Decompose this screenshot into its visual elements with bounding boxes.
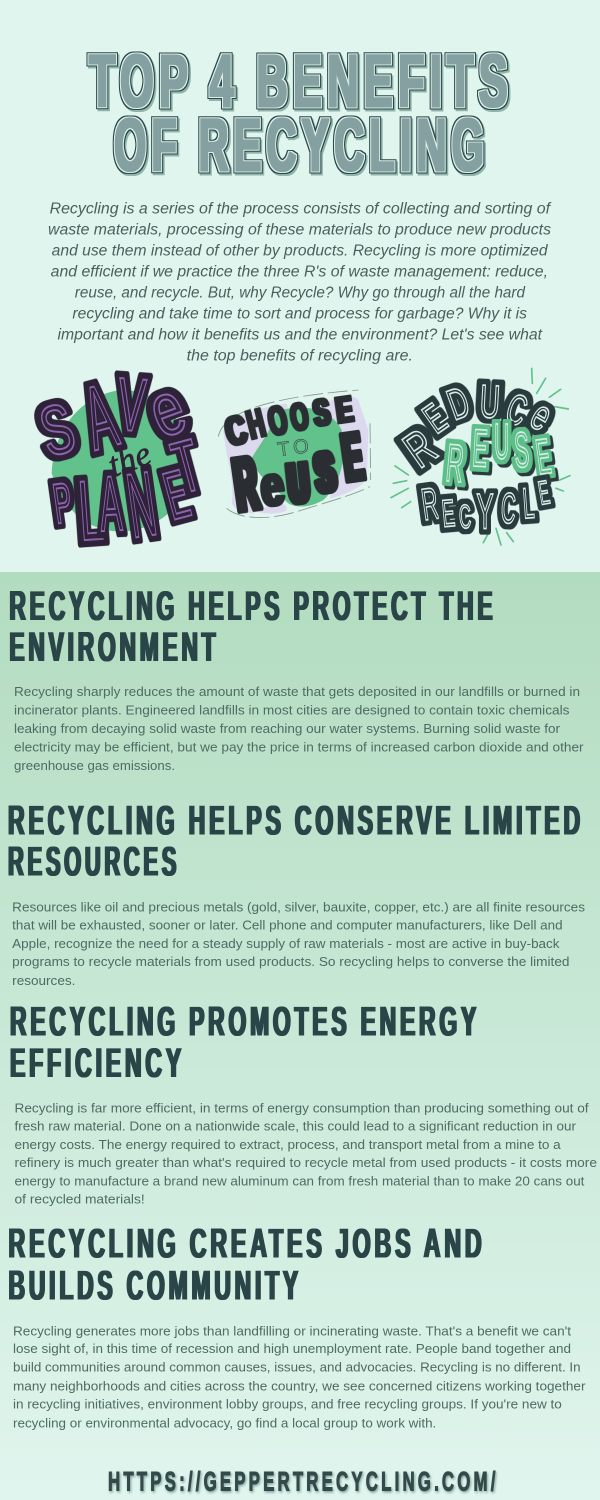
- lettering: recycle: Y: [476, 485, 494, 540]
- heading: [10, 998, 480, 1086]
- lettering: reduce: R: [391, 415, 450, 483]
- lettering: reduce: C: [500, 384, 533, 436]
- lettering: reuse: E: [473, 416, 493, 485]
- heading: [8, 1220, 485, 1308]
- body text: lose sight of, in this time of recession and high unemployment rate. People band together and: [13, 1341, 571, 1356]
- lettering: reduce: e: [523, 390, 561, 440]
- green globe: [52, 390, 190, 532]
- lettering: recycle: R: [418, 478, 442, 530]
- lettering: save: e: [138, 365, 196, 455]
- lettering: save: V: [115, 361, 149, 447]
- body text: resources.: [12, 973, 75, 988]
- body text: Resources like oil and precious metals (gold, silver, bauxite, copper, etc.) are all finite resources: [12, 899, 585, 914]
- lettering: reuse: S: [514, 421, 534, 485]
- title: [89, 40, 513, 186]
- lettering: planet: T: [164, 423, 209, 509]
- lettering: reduce: U: [477, 372, 503, 432]
- body text: energy to manufacture a brand new aluminum can from fresh material than to make 20 cans out: [14, 1174, 585, 1189]
- body text: electricity may be efficient, but we pay the price in terms of increased carbon dioxide and other: [14, 740, 584, 754]
- green rays: [391, 368, 570, 545]
- heading: EFFICIENCY: [10, 1039, 185, 1086]
- body text: many neighborhoods and cities across the country, we see concerned citizens working together: [13, 1378, 586, 1393]
- body text: that will be exhausted, sooner or later. Cell phone and computer manufacturers, like Dell and: [12, 917, 563, 932]
- sticker: save the planet: [29, 356, 212, 564]
- lettering: reuse: S: [513, 423, 530, 479]
- lettering: planet: [47, 418, 212, 564]
- intro paragraph: waste materials, processing of these materials to produce new products: [48, 221, 551, 238]
- lettering: choose: [221, 389, 355, 455]
- lettering: planet: E: [156, 455, 197, 535]
- body text: refinery is much greater than what's required to recycle metal from used products - it costs more: [14, 1155, 597, 1170]
- body text: energy costs. The energy required to extract, process, and transport metal from a mine to a: [14, 1137, 561, 1152]
- heading: [8, 796, 584, 884]
- lettering: reuse: U: [493, 411, 510, 474]
- body text: Recycling is far more efficient, in terms of energy consumption than producing something out of: [14, 1100, 589, 1115]
- lettering: reuse: E: [533, 429, 554, 486]
- lettering: recycle: [417, 470, 554, 543]
- lettering: reuse: E: [534, 428, 558, 492]
- body text: build communities around common causes, issues, and advocacies. Recycling is no different. In: [13, 1360, 581, 1375]
- lettering: recycle: C: [458, 497, 472, 536]
- lettering: save: A: [74, 365, 126, 469]
- body text: greenhouse gas emissions.: [14, 758, 175, 773]
- panel: recycling promotes energy efficiency: [10, 998, 597, 1207]
- lettering: recycle: E: [535, 473, 552, 512]
- body text: recycling or environmental advocacy, go find a local group to work with.: [13, 1415, 436, 1430]
- heading: RESOURCES: [8, 837, 180, 884]
- lettering: reuse: S: [512, 418, 532, 483]
- lettering: recycle: E: [439, 488, 458, 539]
- lettering: reuse: R: [444, 433, 466, 494]
- body text: Recycling sharply reduces the amount of waste that gets deposited in our landfills or burned in: [14, 684, 580, 699]
- intro paragraph: the top benefits of recycling are.: [187, 347, 413, 364]
- intro paragraph: and efficient if we practice the three R's of waste management: reduce,: [51, 263, 548, 280]
- intro paragraph: Recycling is a series of the process consists of collecting and sorting of: [50, 200, 552, 217]
- lettering: recycle: Y: [475, 479, 495, 543]
- lettering: recycle: L: [521, 479, 536, 529]
- lettering: reduce: D: [441, 377, 476, 430]
- body text: Recycling generates more jobs than landfilling or incinerating waste. That's a benefit we can't: [13, 1323, 571, 1338]
- body text: [13, 1323, 586, 1430]
- intro paragraph: reuse, and recycle. But, why Recycle? Why go through all the hard: [75, 284, 526, 301]
- lettering: save: [29, 356, 200, 477]
- lettering: reuse: R: [442, 429, 468, 497]
- lettering: planet: A: [97, 460, 124, 548]
- lettering: choose: E: [334, 389, 355, 431]
- lettering: reuse: E: [531, 426, 556, 490]
- intro paragraph: and use them instead of other by products. Recycling is more optimized: [52, 242, 549, 259]
- lettering: planet: L: [72, 456, 109, 564]
- lettering: reduce: E: [412, 391, 459, 446]
- lettering: choose: C: [221, 407, 251, 455]
- lettering: planet: A: [95, 455, 127, 554]
- intro paragraph: [48, 200, 552, 364]
- sticker: reduce reuse recycle: [391, 368, 570, 545]
- panel: recycling helps protect the environment: [9, 582, 584, 773]
- heading: BUILDS COMMUNITY: [8, 1261, 302, 1308]
- heading: ENVIRONMENT: [9, 623, 219, 670]
- lettering: recycle: R: [417, 474, 443, 534]
- body text: [12, 899, 585, 988]
- lettering: planet: T: [161, 418, 212, 514]
- panel: recycling creates jobs and builds community: [8, 1220, 586, 1430]
- lettering: recycle: C: [500, 484, 517, 534]
- body text: Apple, recognize the need for a steady supply of raw materials - most are active in buy-back: [12, 936, 560, 951]
- green blob: [252, 408, 343, 507]
- lettering: choose: H: [243, 401, 269, 448]
- lettering: recycle: C: [457, 493, 473, 539]
- lettering: reduce: U: [478, 376, 501, 429]
- lettering: reuse: U: [285, 453, 311, 516]
- lettering: to: TO: [276, 435, 314, 461]
- lettering: reuse: S: [311, 441, 339, 505]
- body text: in recycling initiatives, environment lobby groups, and free recycling groups. If you're new to: [13, 1397, 562, 1412]
- body text: [14, 684, 584, 773]
- lettering: choose: O: [264, 396, 291, 444]
- lettering: reuse: R: [229, 442, 263, 528]
- lettering: recycle: E: [534, 470, 554, 516]
- lettering: planet: N: [119, 447, 164, 563]
- lettering: reuse: U: [496, 414, 513, 477]
- lettering: reduce: e: [519, 386, 564, 445]
- lettering: recycle: L: [519, 476, 537, 532]
- lettering: reduce: E: [415, 395, 456, 443]
- sticker: choose to reuse: [218, 389, 371, 528]
- intro paragraph: recycling and take time to sort and process for garbage? Why it is: [72, 305, 527, 322]
- lettering: reuse: E: [338, 419, 367, 495]
- lettering: reuse: U: [494, 414, 509, 470]
- lettering: reduce: [391, 372, 564, 483]
- lettering: reuse: R: [445, 432, 470, 500]
- lettering: choose: O: [287, 394, 312, 439]
- lettering: planet: N: [121, 452, 162, 557]
- lettering: reuse: E: [471, 418, 489, 479]
- panel: recycling helps conserve limited resources: [8, 796, 585, 988]
- body text: programs to recycle materials from used products. So recycling helps to converse the limited: [12, 954, 569, 969]
- lettering: save: e: [133, 358, 200, 460]
- heading: [9, 582, 496, 670]
- lettering: planet: P: [49, 472, 76, 536]
- lettering: reuse: [442, 411, 558, 500]
- lettering: choose: S: [311, 391, 332, 435]
- lettering: planet: P: [47, 466, 78, 541]
- body text: leaking from decaying solid waste from reaching our water systems. Burning solid waste for: [14, 721, 561, 736]
- outline strokes: [218, 390, 371, 518]
- lettering: save: A: [70, 360, 130, 476]
- lettering: planet: E: [154, 450, 200, 539]
- lettering: reduce: R: [394, 419, 447, 479]
- lettering: reuse: E: [470, 414, 490, 482]
- lettering: reuse: e: [258, 454, 287, 519]
- lettering: save: S: [29, 383, 86, 477]
- lettering: save: S: [32, 388, 83, 472]
- body text: of recycled materials!: [14, 1192, 145, 1207]
- lettering: reduce: C: [498, 380, 536, 440]
- body text: incinerator plants. Engineered landfills in most cities are designed to contain toxic chemicals: [14, 703, 570, 718]
- body text: [14, 1100, 597, 1207]
- lettering: the: the: [103, 434, 156, 485]
- lavender backing: [223, 396, 368, 514]
- lettering: planet: L: [76, 463, 106, 559]
- lettering: reduce: D: [438, 373, 478, 433]
- intro paragraph: important and how it benefits us and the environment? Let's see what: [58, 326, 543, 343]
- lettering: save: V: [113, 356, 151, 453]
- body text: fresh raw material. Done on a nationwide scale, this could lead to a significant reduction in our: [14, 1118, 577, 1133]
- lettering: recycle: E: [440, 493, 457, 536]
- lettering: recycle: C: [498, 481, 518, 537]
- lettering: reuse: [229, 419, 367, 528]
